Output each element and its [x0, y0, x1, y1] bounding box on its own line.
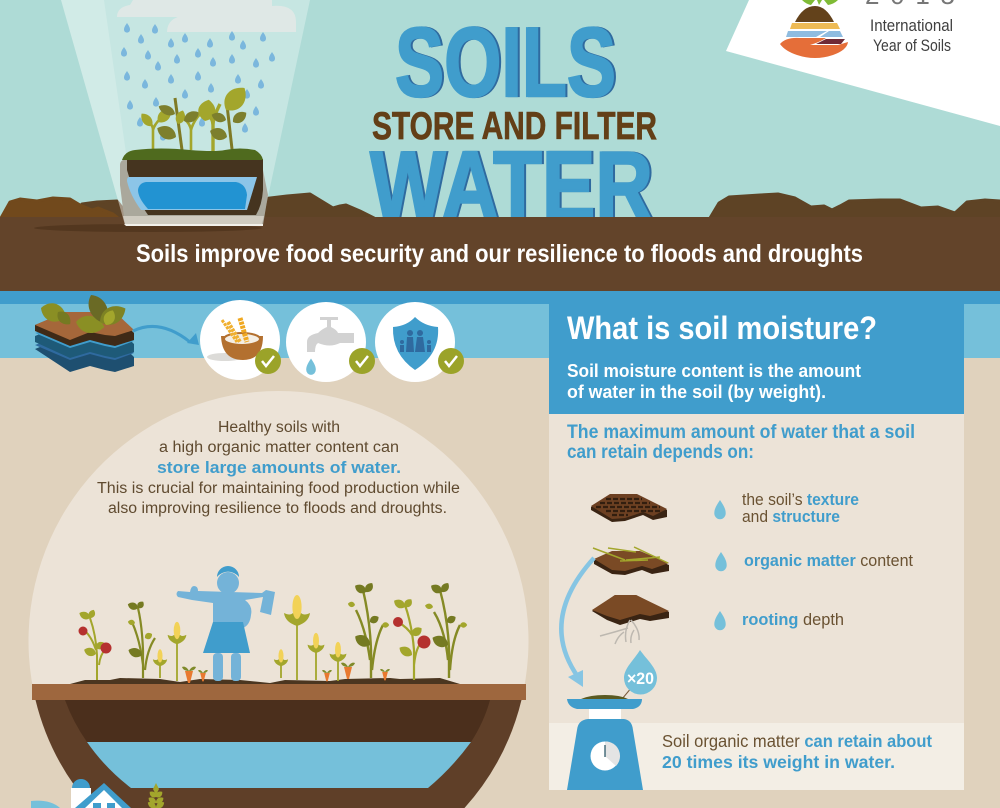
layered soil icon [35, 291, 134, 372]
scale icon [567, 687, 643, 790]
icon: water tap [286, 302, 375, 382]
organic matter icon [593, 547, 669, 575]
definition [567, 360, 861, 402]
main title: STORE AND FILTER [372, 105, 657, 148]
subheading: can retain depends on: [567, 442, 754, 463]
wheat plant [146, 783, 166, 808]
retention callout [662, 731, 932, 772]
farm house at bottom edge [31, 779, 131, 808]
light beam [61, 0, 310, 225]
retention callout: 20 times its weight in water. [662, 752, 895, 772]
text block [97, 419, 460, 517]
text block: Healthy soils with [218, 419, 340, 436]
blue bands [0, 291, 1000, 808]
bullet drops [714, 500, 727, 630]
text block: a high organic matter content can [159, 439, 399, 456]
surface soil bar [32, 684, 526, 700]
logo mark [780, 0, 848, 58]
small corn plants left [153, 622, 186, 681]
rooting depth icon [592, 595, 669, 644]
ground strip [0, 217, 1000, 291]
silo [72, 779, 90, 788]
bottom strip [549, 723, 964, 790]
main title: SOILS [395, 7, 616, 117]
arrow from soil to icons [133, 326, 199, 345]
grass layer [122, 148, 263, 160]
pea plant right [425, 581, 467, 678]
pea plant centre right [347, 581, 389, 678]
soil texture icon [591, 494, 667, 522]
subheading [567, 422, 915, 463]
hill [31, 801, 60, 808]
rain drops [121, 23, 275, 141]
hills on the horizon [1, 194, 1000, 219]
carrots right [322, 663, 390, 681]
item texts: organic matter content [744, 552, 913, 570]
item texts: and structure [742, 508, 840, 526]
retention callout: Soil organic matter can retain about [662, 731, 932, 751]
item texts: the soil’s texture [742, 491, 859, 509]
subheading: The maximum amount of water that a soil [567, 422, 915, 443]
pot shadow [34, 224, 262, 232]
subtitle: Soils improve food security and our resilience to floods and droughts [136, 240, 863, 268]
farmer [176, 566, 275, 681]
item texts: rooting depth [742, 611, 844, 629]
soil block illustration with rain [34, 0, 310, 232]
logo corner panel [726, 0, 1000, 126]
corn plants right [274, 595, 346, 681]
glass base [123, 216, 264, 224]
tomato plant left [78, 609, 112, 680]
icon: food security [200, 300, 281, 380]
curved arrow to scale [561, 558, 594, 687]
pea plant left [127, 600, 155, 678]
text block: store large amounts of water. [157, 458, 401, 477]
main title [369, 26, 657, 217]
soil body [127, 159, 263, 215]
leaves on soil [38, 291, 129, 335]
glass container [120, 159, 268, 225]
x20 water drop [624, 650, 657, 695]
sky background [0, 0, 1000, 218]
definition: Soil moisture content is the amount [567, 360, 861, 381]
plants [138, 82, 252, 152]
text block: also improving resilience to floods and droughts. [108, 500, 447, 517]
icon: family shield [375, 302, 464, 382]
main title: WATER [370, 131, 653, 241]
panel heading: What is soil moisture? [567, 310, 877, 346]
crop soil [70, 678, 460, 684]
item texts [742, 491, 913, 629]
house [75, 783, 131, 808]
x20 water drop: ×20 [627, 669, 654, 688]
logo corner panel: Year of Soils [873, 36, 951, 55]
tomato plant right [392, 597, 430, 680]
clouds [117, 0, 296, 32]
text block: This is crucial for maintaining food production while [97, 480, 460, 497]
logo corner panel: International [870, 16, 953, 35]
circular panel: healthy soils [29, 391, 529, 808]
definition: of water in the soil (by weight). [567, 381, 826, 402]
stored water [127, 177, 257, 210]
panel: what is soil moisture [549, 304, 964, 790]
carrots left [182, 667, 208, 683]
soil cross-section [36, 700, 522, 808]
